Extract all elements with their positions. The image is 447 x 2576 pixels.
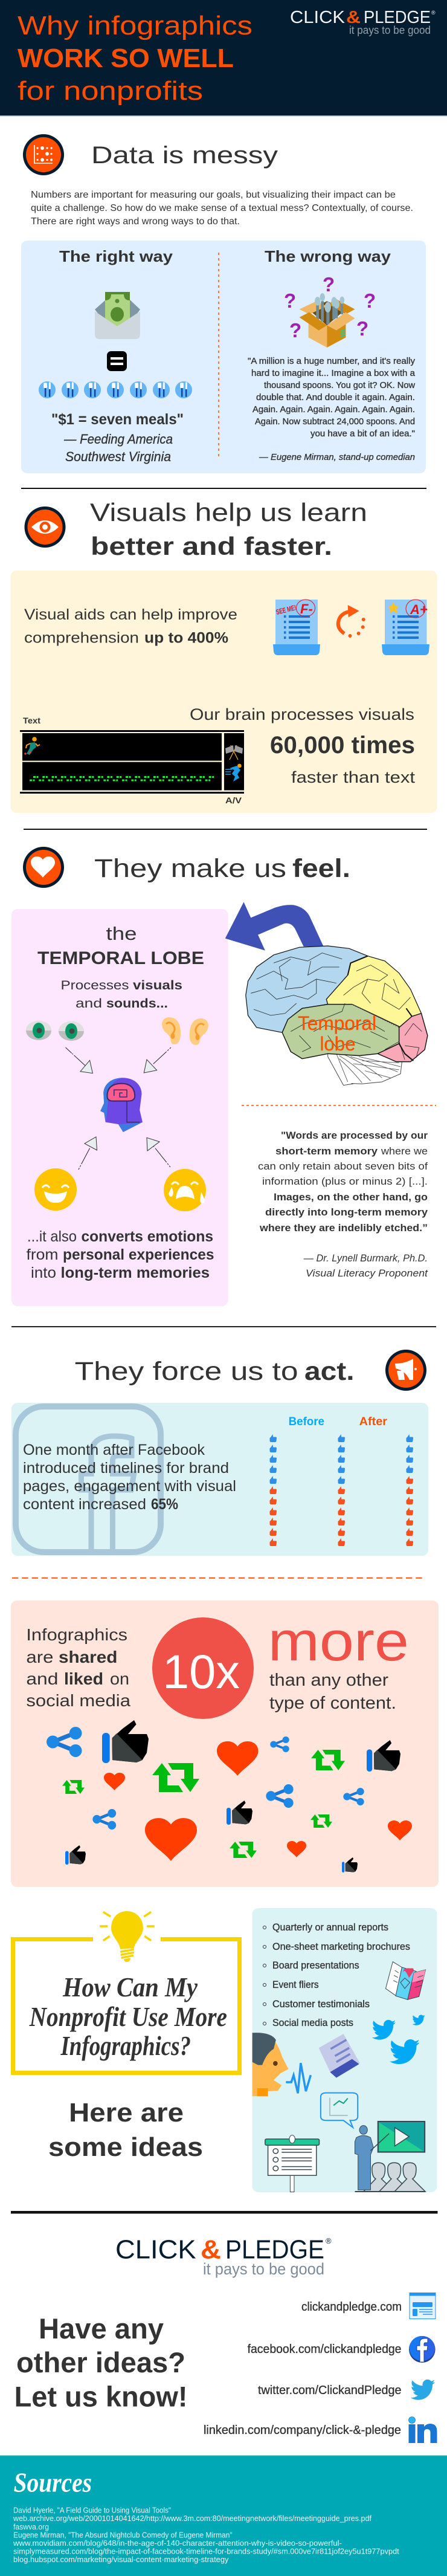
quote: Eugene Mirman: [248, 357, 416, 462]
icon: box of spoons with question marks: ?: [323, 273, 335, 296]
header banner: [0, 0, 447, 116]
icon: box of spoons with question marks: ?: [364, 290, 376, 312]
icon: Facebook watermark: [16, 1406, 161, 1552]
arrow: crying face to brain: [147, 1138, 170, 1167]
icon: failing test: F-: [300, 601, 313, 616]
icon: website: [410, 2293, 436, 2319]
quote: Eugene Mirman: thousand spoons. You got it? OK. Now: [264, 381, 416, 390]
heading: The wrong way: The wrong way: [265, 247, 391, 265]
text: engagement increased 65%: introduced timelines for brand: [23, 1460, 229, 1477]
icon: laughing face: [34, 1168, 77, 1211]
list: source references: www.movidiam.com/blog/648/in-the-age-of-140-character-attention-why-is-video-so-powerful-: [13, 2539, 342, 2548]
attribution: Feeding America: — Feeding America: [63, 432, 173, 447]
stat: 60,000 times: 60,000 times: [270, 732, 415, 759]
icon: facebook: [409, 2336, 436, 2363]
icon: improvement arrow: [338, 605, 365, 638]
icon: box of spoons with question marks: ?: [284, 290, 296, 312]
text: shared and liked: Infographics: [26, 1625, 127, 1644]
illustrations: brochure, testimonial, document, birds, presenter: [252, 1962, 426, 2192]
intro paragraph: quite a challenge. So how do we make sense of a textual mess? Contextually, of course.: [31, 203, 413, 213]
panel: right way vs wrong way: [21, 241, 426, 473]
heading: They make us feel: feel.: [292, 854, 350, 883]
icon: crying face: [164, 1169, 206, 1211]
logo: Click & Pledge (header): it pays to be good: [349, 24, 431, 36]
panel: infographic ideas: [252, 1908, 437, 2192]
heading: Have any other ideas? Let us know!: Have any: [39, 2312, 164, 2345]
heading: They force us to act: act.: [304, 1357, 355, 1386]
text: more than any other type of content: more: [268, 1611, 409, 1672]
icon: brochure: [385, 1962, 426, 1999]
text: processes visuals and sounds: [60, 979, 182, 1011]
icon: box of spoons with question marks: ?: [289, 319, 301, 341]
icon: equals: [107, 351, 127, 371]
list: source references: [13, 2506, 399, 2564]
quote: Dr. Lynell Burmark: Visual Literacy Proponent: [306, 1267, 428, 1279]
text: shared and liked: are: [26, 1648, 53, 1666]
label: Text: Text: [23, 716, 40, 725]
logo: Click & Pledge (header): PLEDGE: [364, 8, 431, 27]
panel: comprehension and speed: [11, 571, 437, 813]
icon: finish flags: [225, 745, 243, 760]
list: source references: web.archive.org/web/20001014041642/http://www.3m.com:80/meetingnetwork/files/meetingguide_pres.pdf: [13, 2514, 371, 2523]
logo: Click & Pledge (header): CLICK: [290, 8, 346, 27]
text: engagement increased 65%: content increased: [23, 1496, 146, 1513]
logo: Click & Pledge (header): ®: [431, 10, 436, 16]
icon: megaphone: [385, 1350, 426, 1391]
icon: speech bubble with chart: [321, 2093, 358, 2128]
list: ideas: Customer testimonials: [272, 1998, 370, 2010]
text: converts emotions: ...it also: [27, 1228, 77, 1245]
icon: audience: [364, 2163, 425, 2192]
attribution: Feeding America: [63, 432, 173, 464]
quote: Dr. Lynell Burmark: Images, on the other hand, go: [274, 1191, 428, 1203]
icons: twitter birds: [372, 2015, 425, 2064]
quote: Dr. Lynell Burmark: where we: [381, 1145, 428, 1157]
quote: Eugene Mirman: — Eugene Mirman, stand-up comedian: [259, 453, 415, 462]
quote: Dr. Lynell Burmark: [258, 1130, 428, 1279]
text: converts emotions: long-term memories: [60, 1264, 210, 1281]
list: source references: blog.hubspot.com/marketing/visual-content-marketing-strategy: [13, 2555, 229, 2564]
arrow: brain to panel: [225, 902, 324, 951]
heading: They make us feel: [94, 854, 350, 883]
stat: up to 400%: [24, 606, 237, 647]
heading: the TEMPORAL LOBE: TEMPORAL LOBE: [37, 948, 204, 968]
quote: Eugene Mirman: hard to imagine it... Imagine a box with a: [251, 369, 416, 378]
icon: failing test: [273, 600, 320, 655]
list: source references: faswva.org: [13, 2522, 49, 2531]
list: source references: David Hyerle, "A Field Guide to Using Visual Tools": [13, 2506, 171, 2515]
logo: Click & Pledge (footer): [115, 2235, 332, 2278]
icon: eye: [24, 506, 65, 548]
icon: fast runner: [225, 764, 242, 782]
heading: the TEMPORAL LOBE: the: [106, 923, 137, 944]
link: twitter: twitter.com/ClickandPledge: [258, 2384, 401, 2397]
heading: Here are some ideas: some ideas: [48, 2132, 203, 2162]
link: linkedin: linkedin.com/company/click-&-pledge: [204, 2424, 401, 2437]
panel: Facebook engagement: [11, 1403, 428, 1556]
arrow: happy face to brain: [79, 1137, 97, 1170]
stat: up to 400%: Visual aids can help improve: [24, 606, 237, 623]
logo: Click & Pledge (header): &: [346, 8, 361, 27]
quote: $1 = seven meals: "$1 = seven meals": [51, 411, 184, 428]
callout: How can my nonprofit use more infographics: How Can My: [62, 1972, 198, 2002]
icon: sound wave: [286, 2063, 310, 2093]
text: converts emotions: into: [31, 1264, 56, 1281]
icon: heart: [23, 847, 64, 888]
quote: Dr. Lynell Burmark: "Words are processed by our: [281, 1130, 428, 1141]
icon: light bulb: [100, 1911, 155, 1962]
icon: failing test: SEE ME!: [275, 603, 297, 616]
icon: speaking face: [252, 2033, 289, 2096]
icon: flip board: [265, 2135, 320, 2192]
text: engagement increased 65%: [23, 1442, 236, 1513]
icon: scatter chart: [23, 134, 64, 175]
heading: Visuals help us learn better and faster: better and faster.: [91, 532, 332, 560]
arrow: eyes to brain: [65, 1047, 92, 1073]
icon: passing test: [382, 600, 429, 655]
heading: Have any other ideas? Let us know!: other ideas?: [16, 2346, 185, 2378]
label: Temporal lobe: lobe: [320, 1033, 355, 1055]
icon: linkedin: [408, 2416, 437, 2443]
heading: Visuals help us learn better and faster: [90, 498, 367, 560]
heading: Have any other ideas? Let us know!: [14, 2312, 187, 2413]
icon: presenter: [355, 2126, 425, 2192]
text: shared and liked: [26, 1625, 130, 1710]
quote: Eugene Mirman: double that. And double it again. Again.: [256, 393, 415, 403]
quote: Dr. Lynell Burmark: can only retain about seven bits of: [258, 1160, 428, 1172]
logo: Click & Pledge (footer): PLEDGE: [225, 2235, 324, 2265]
link: website: clickandpledge.com: [301, 2300, 402, 2314]
label: After: After: [359, 1416, 388, 1428]
text: processes visuals and sounds: sounds...: [106, 997, 168, 1011]
heading: The right way: The right way: [59, 247, 173, 265]
logo: Click & Pledge (footer): CLICK: [115, 2235, 196, 2265]
heading: Here are some ideas: Here are: [69, 2098, 184, 2128]
heading: Data is messy: Data is messy: [91, 142, 278, 169]
text: shared and liked: liked: [64, 1669, 103, 1688]
icons: scattered hearts: [104, 1741, 412, 1861]
icons: scattered share symbols: [47, 1727, 364, 1830]
text: processes visuals and sounds: and: [76, 997, 102, 1011]
quote: Dr. Lynell Burmark: — Dr. Lynell Burmark, Ph.D.: [303, 1252, 428, 1264]
link: facebook: facebook.com/clickandpledge: [248, 2343, 401, 2356]
icon: video screen: [378, 2121, 425, 2152]
icon: ears: [162, 1017, 208, 1045]
text: shared and liked: and: [26, 1669, 58, 1688]
icon row: seven meals: [39, 381, 192, 398]
text: engagement increased 65%: pages, engagement with visual: [23, 1478, 236, 1495]
footprints trail: [30, 777, 216, 780]
list: source references: simplymeasured.com/blog/the-impact-of-facebook-timeline-for-brands-study/#sm.000ve7ir811jof2ey5u1t977pvpdt: [13, 2547, 399, 2556]
text: processes visuals and sounds: visuals: [133, 979, 182, 992]
list: ideas: [263, 1921, 410, 2028]
stat: 10x: [152, 1617, 254, 1719]
quote: Eugene Mirman: Again. Now subtract 24,000 spoons. And: [255, 417, 415, 427]
text: converts emotions: [27, 1228, 214, 1281]
quote: Eugene Mirman: "A million is a huge number, and it's really: [248, 357, 416, 366]
text: more than any other type of content: type of content.: [269, 1694, 396, 1713]
chart: race between text and A/V: [20, 716, 244, 805]
heading: They force us to act: They force us to: [75, 1357, 298, 1386]
heading: Visuals help us learn better and faster: Visuals help us learn: [90, 498, 367, 526]
label: Temporal lobe: [298, 1012, 376, 1055]
list: ideas: Social media posts: [272, 2017, 353, 2028]
heading: Sources: Sources: [14, 2467, 92, 2498]
text: converts emotions: from: [27, 1246, 58, 1263]
logo: Click & Pledge (header): [290, 8, 436, 36]
label: Before: Before: [289, 1416, 324, 1428]
intro paragraph: There are right ways and wrong ways to do that.: [31, 216, 240, 227]
quote: Dr. Lynell Burmark: information (plus or minus 2) [...].: [262, 1176, 428, 1187]
text: converts emotions: converts emotions: [81, 1228, 213, 1245]
text: more than any other type of content: than any other: [269, 1671, 388, 1690]
quote: Eugene Mirman: you have a bit of an idea.": [310, 429, 415, 439]
callout: How can my nonprofit use more infographics: [13, 1939, 239, 2073]
stat: up to 400%: comprehension: [24, 630, 139, 647]
callout: How can my nonprofit use more infographics: Nonprofit Use More: [29, 2001, 227, 2032]
illustration: brain with temporal lobe: [246, 946, 428, 1086]
quote: Dr. Lynell Burmark: short-term memory: [275, 1145, 378, 1157]
title: WORK SO WELL: [18, 44, 234, 73]
text: more than any other type of content: [268, 1611, 409, 1713]
stat: 60,000 times: Our brain processes visuals: [190, 705, 414, 723]
icon: passing test: A+: [410, 602, 428, 617]
text: processes visuals and sounds: Processes: [60, 979, 129, 992]
text: engagement increased 65%: One month after Facebook: [23, 1442, 205, 1458]
intro paragraph: Numbers are important for measuring our goals, but visualizing their impact can be: [31, 190, 396, 200]
text: engagement increased 65%: 65%: [151, 1496, 178, 1513]
text: shared and liked: on: [110, 1669, 129, 1688]
stat: 60,000 times: [190, 705, 416, 786]
quote: Dr. Lynell Burmark: directly into long-term memory: [265, 1206, 428, 1218]
heading: They force us to act: [75, 1357, 355, 1386]
list: source references: Eugene Mirman, "The Absurd Nightclub Comedy of Eugene Mirman": [13, 2531, 233, 2540]
icon: money envelope: [95, 292, 140, 339]
label: A/V: A/V: [225, 795, 242, 805]
icon: document: [319, 2034, 360, 2078]
attribution: Feeding America: Southwest Virginia: [65, 449, 171, 464]
icon: eyes: [26, 1021, 84, 1041]
text: converts emotions: personal experiences: [63, 1246, 214, 1263]
list: ideas: One-sheet marketing brochures: [272, 1941, 410, 1952]
icons: scattered retweet symbols: [62, 1750, 345, 1858]
arrow: ears to brain: [144, 1047, 171, 1073]
text: shared and liked: shared: [59, 1648, 117, 1666]
title: [18, 11, 252, 106]
heading: the TEMPORAL LOBE: [37, 923, 204, 968]
logo: Click & Pledge (footer): &: [201, 2235, 221, 2265]
logo: Click & Pledge (footer): it pays to be good: [203, 2260, 324, 2278]
icon: box of spoons with question marks: [284, 273, 376, 348]
quote: Dr. Lynell Burmark: where they are indelibly etched.”: [259, 1222, 428, 1234]
title: for nonprofits: [18, 76, 203, 106]
panel: the temporal lobe: [11, 909, 228, 1306]
intro paragraph: [31, 190, 413, 227]
label: Temporal lobe: Temporal: [298, 1012, 376, 1034]
logo: Click & Pledge (footer): ®: [326, 2236, 332, 2245]
heading: They make us feel: They make us: [94, 854, 286, 883]
callout: How can my nonprofit use more infographics: Infographics?: [60, 2030, 191, 2061]
pictogram: thumbs before and after: [269, 1434, 413, 1546]
stat: up to 400%: up to 400%: [144, 630, 228, 647]
panel: 10x more: [11, 1600, 439, 1887]
icons: scattered like symbols: [65, 1720, 400, 1872]
heading: Have any other ideas? Let us know!: Let us know!: [14, 2381, 187, 2413]
stat: 60,000 times: faster than text: [291, 768, 416, 786]
title: Why infographics: [18, 11, 252, 40]
stat: 10x: 10x: [162, 1645, 240, 1698]
footer: sources: [0, 2455, 447, 2576]
icon: slow runner: [24, 737, 40, 755]
list: ideas: Event fliers: [272, 1979, 319, 1990]
list: ideas: Quarterly or annual reports: [272, 1921, 388, 1933]
icon: twitter: [411, 2380, 435, 2400]
text: shared and liked: social media: [26, 1691, 130, 1710]
quote: Eugene Mirman: Again. Again. Again. Again. Again. Again.: [252, 405, 415, 415]
icon: box of spoons with question marks: ?: [356, 317, 368, 340]
list: ideas: Board presentations: [272, 1960, 359, 1971]
heading: Here are some ideas: [48, 2098, 203, 2162]
icon: head with brain: [100, 1078, 143, 1132]
